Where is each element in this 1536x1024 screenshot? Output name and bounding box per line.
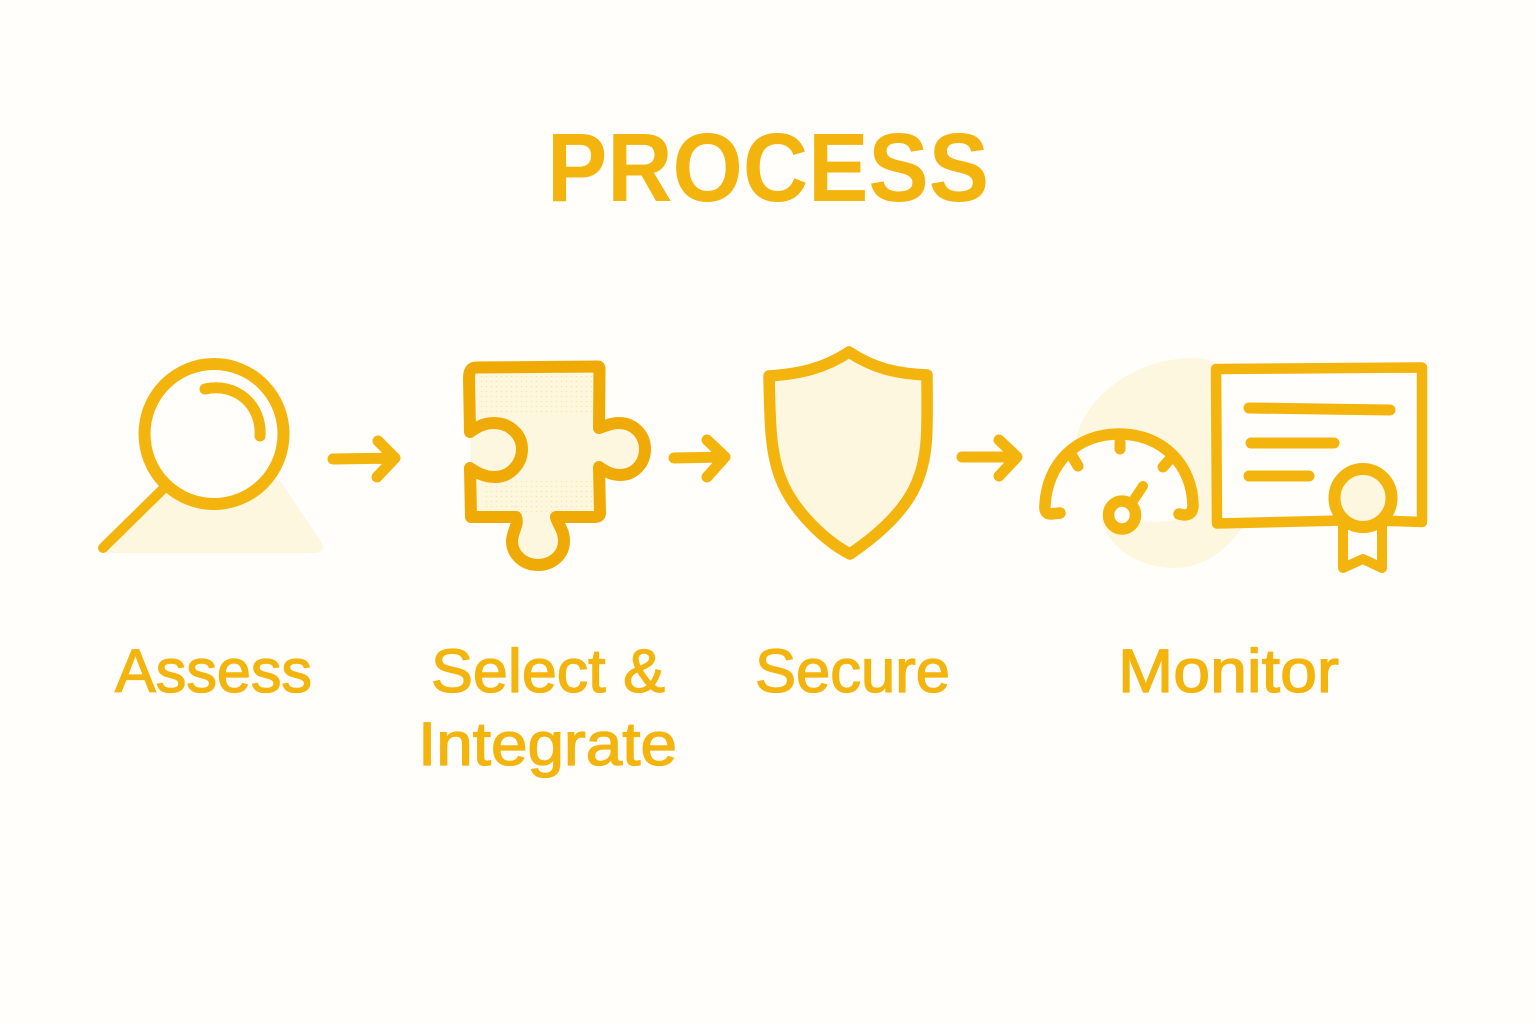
certificate ribbon bbox=[1343, 525, 1382, 568]
magnifier highlight bbox=[205, 388, 260, 436]
label line two: Integrate bbox=[418, 710, 677, 778]
certificate text lines bbox=[1249, 408, 1390, 476]
icon: magnifying glass bbox=[103, 364, 323, 553]
icon: pale blob behind gauge bbox=[1077, 358, 1262, 568]
icon: shield bbox=[769, 352, 927, 554]
puzzle dot texture bbox=[478, 376, 592, 512]
puzzle outline bbox=[469, 366, 645, 565]
title: PROCESS bbox=[547, 113, 989, 222]
magnifier handle bbox=[103, 490, 162, 548]
gauge ticks bbox=[1072, 442, 1171, 467]
icon: certificate bbox=[1216, 368, 1422, 568]
icon: puzzle piece bbox=[469, 366, 645, 565]
certificate sheet bbox=[1216, 368, 1422, 524]
gauge arc bbox=[1045, 434, 1193, 515]
gauge needle bbox=[1133, 486, 1143, 501]
icon: speedometer gauge bbox=[1045, 434, 1193, 529]
certificate seal bbox=[1334, 469, 1392, 527]
gauge hub bbox=[1108, 501, 1136, 529]
arrow: assess to select bbox=[333, 441, 395, 477]
magnifier pale triangle backdrop bbox=[106, 481, 323, 553]
label: assess: Assess bbox=[115, 637, 312, 705]
gauge interior bbox=[1050, 434, 1193, 522]
label: select and integrate bbox=[418, 637, 677, 778]
arrow: secure to monitor bbox=[962, 440, 1017, 476]
puzzle fill bbox=[470, 368, 645, 565]
label: secure: Secure bbox=[755, 637, 950, 705]
label: monitor: Monitor bbox=[1118, 637, 1339, 705]
magnifier lens bbox=[144, 364, 284, 504]
arrow: select to secure bbox=[674, 440, 725, 477]
label line one: Select & bbox=[431, 637, 665, 705]
